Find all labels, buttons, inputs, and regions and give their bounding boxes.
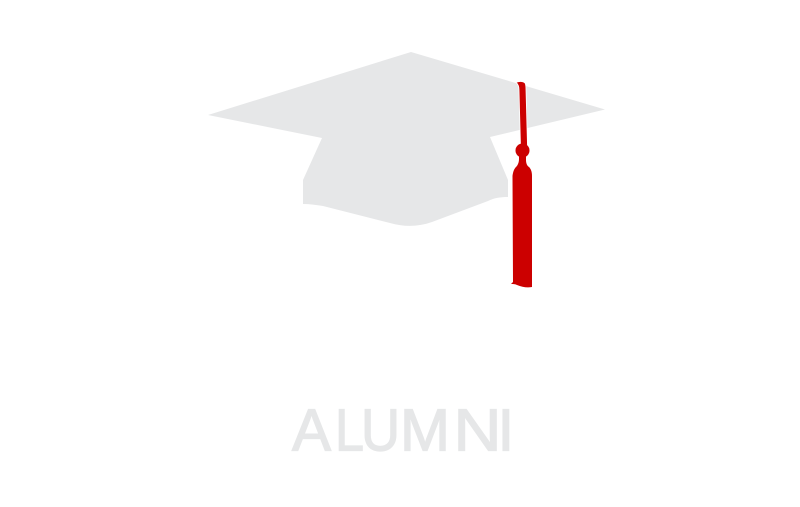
- heading: ALUMNI: N: [454, 398, 502, 464]
- heading: ALUMNI: M: [400, 398, 450, 464]
- heading: ALUMNI: L: [335, 398, 364, 464]
- tassel cord: [516, 81, 528, 146]
- icon: red tassel: [511, 81, 532, 287]
- heading: ALUMNI: I: [498, 398, 514, 464]
- cap board and skull: [208, 52, 605, 226]
- tassel body: [511, 155, 532, 287]
- icon: graduation cap: [208, 52, 605, 287]
- tassel bead: [516, 144, 530, 158]
- heading: ALUMNI: U: [361, 398, 400, 464]
- heading: ALUMNI: A: [292, 398, 332, 464]
